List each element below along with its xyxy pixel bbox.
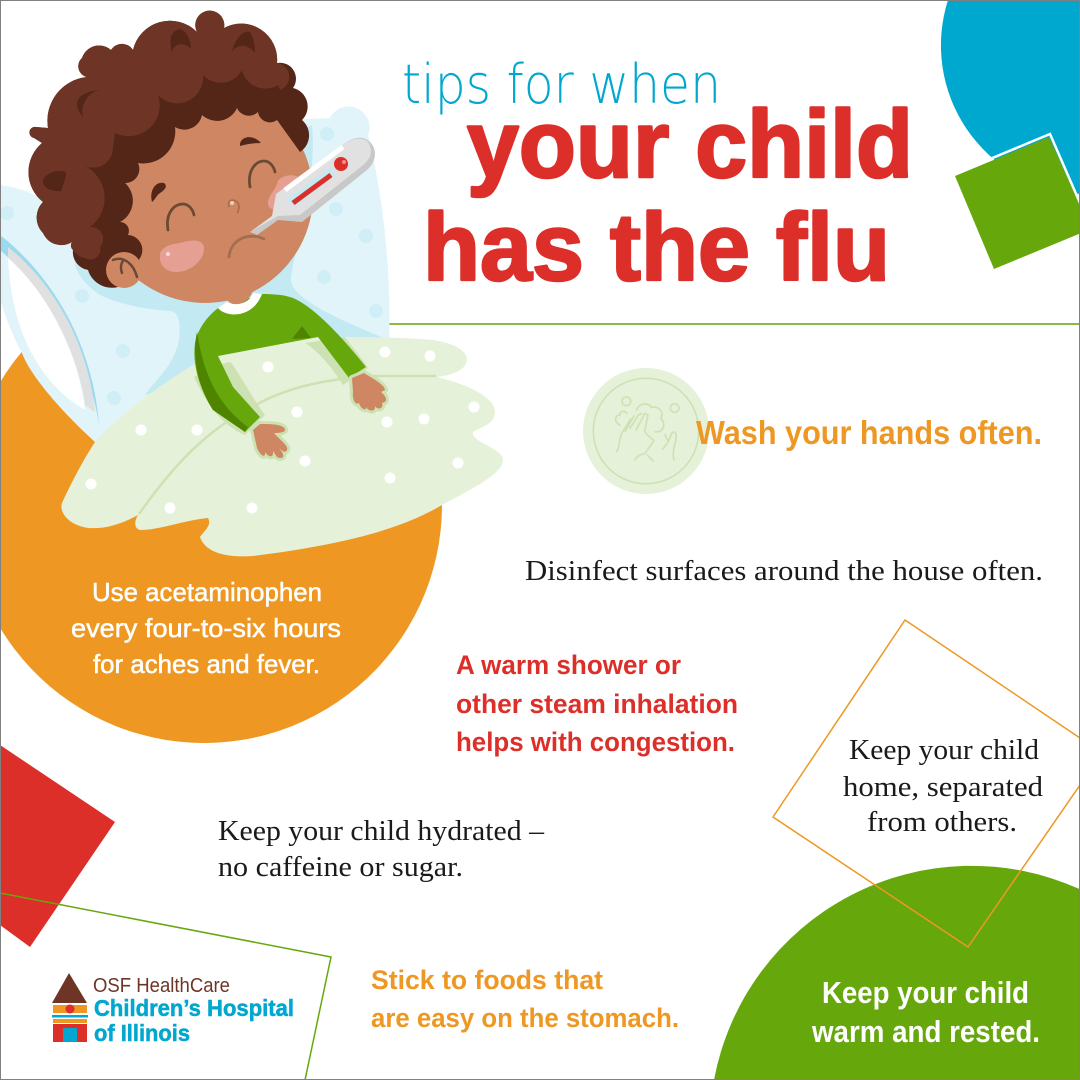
face details: brows, eyes, nose, mouth, cheeks [151,137,302,272]
tip: warm shower: helps with congestion. [456,727,735,757]
collar [218,293,262,314]
tip: acetaminophen: for aches and fever. [93,649,320,679]
decorative shape: blue circle [941,0,1080,194]
pillow [0,106,390,442]
tip: keep child hydrated [218,816,545,883]
blanket [61,337,503,556]
tip: keep child home: Keep your child [849,735,1039,766]
tip: acetaminophen: every four-to-six hours [71,613,341,643]
logo: OSF HealthCare Children's Hospital of Illinois [52,973,294,1046]
tip: keep child home: home, separated [843,772,1043,803]
tip: wash your hands: Wash your hands often. [696,414,1042,451]
decorative shape: green circle [714,866,1080,1080]
tip: keep child hydrated: Keep your child hydrated – [218,816,545,847]
tip: foods easy on stomach [371,965,679,1033]
logo text: of Illinois [94,1020,190,1046]
tip: foods easy on stomach: are easy on the stomach. [371,1003,679,1033]
tip: warm and rested [811,975,1040,1049]
tip: warm shower: other steam inhalation [456,689,738,719]
tip: warm shower [456,650,738,757]
title line: tips for when: tips for when [402,53,721,116]
title [402,53,913,301]
hands [253,373,386,458]
tip: keep child home: from others. [867,807,1017,838]
tip: warm and rested: Keep your child [822,975,1029,1010]
title line: has the flu: has the flu [423,194,890,301]
face [97,87,313,303]
tip: acetaminophen [71,577,341,679]
shirt [194,288,366,432]
tip: acetaminophen: Use acetaminophen [92,577,322,607]
divider line [389,323,1080,325]
tip: warm and rested: warm and rested. [811,1014,1040,1049]
decorative outline: orange diamond [773,620,1080,947]
tip: disinfect surfaces: Disinfect surfaces around the house often. [525,556,1043,587]
icon: washing hands [583,368,709,494]
logo text [93,975,294,1046]
tip: keep child hydrated: no caffeine or sugar. [218,852,463,883]
decorative outline: green frame around logo [0,893,331,1080]
title line: your child: your child [467,91,913,198]
neck [225,288,254,304]
tip: warm shower: A warm shower or [456,650,681,680]
decorative shape: green square [955,137,1080,269]
thermometer [250,138,375,235]
logo text: Children’s Hospital [94,995,294,1021]
illustration: sick child in bed [0,11,503,556]
logo icon: house [52,973,88,1042]
logo text: OSF HealthCare [93,975,230,997]
decorative shape: orange circle [0,267,442,743]
hair [28,11,309,288]
ear [106,252,142,288]
tip: keep child home [843,735,1043,838]
decorative shape: red square [0,745,115,947]
tip: foods easy on stomach: Stick to foods that [371,965,603,995]
